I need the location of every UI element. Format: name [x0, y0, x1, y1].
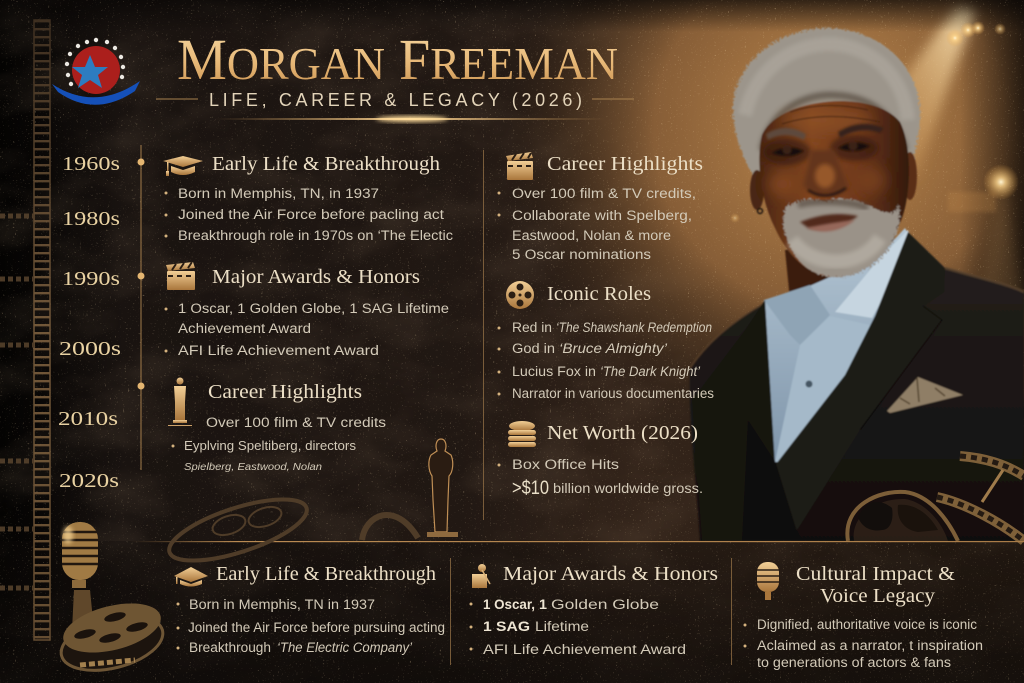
- oscar statue: [427, 439, 458, 537]
- timeline: [58, 145, 144, 492]
- heading: Iconic Roles: [547, 284, 651, 305]
- bullet list: Narrator in various documentaries: [512, 386, 714, 401]
- eye socket shading: [763, 139, 811, 165]
- bullet list: 1 Oscar,: [483, 597, 535, 612]
- decade 1990s: 1990s: [62, 268, 120, 290]
- bullet list: [744, 617, 983, 670]
- icon: award and clapper: [472, 564, 490, 588]
- heading: Voice Legacy: [820, 586, 935, 607]
- divider: center column: [483, 150, 484, 520]
- bullet list: 1 Oscar, 1 Golden Globe, 1 SAG Lifetime: [178, 301, 449, 316]
- panel: bottom early life: [174, 564, 445, 655]
- nose: [803, 150, 848, 195]
- heading: Cultural Impact &: [796, 564, 955, 585]
- hair: [733, 28, 920, 185]
- pocket square: [887, 377, 963, 413]
- mouth: [800, 214, 858, 230]
- decade 1980s: 1980s: [62, 208, 120, 230]
- heading: Career Highlights: [547, 154, 703, 175]
- text lines: >$10: [512, 478, 549, 499]
- bullet list: [470, 597, 686, 657]
- divider: bottom left: [450, 558, 451, 665]
- heading: Major Awards & Honors: [212, 267, 420, 288]
- panel: net worth: [498, 421, 703, 499]
- bullet list: Born in Memphis, TN, in 1937: [178, 186, 379, 201]
- ears: [750, 170, 764, 210]
- divider: bottom right: [731, 558, 732, 665]
- bullet list: [498, 186, 696, 262]
- subtitle: LIFE, CAREER & LEGACY (2026): [209, 90, 582, 110]
- panel: iconic roles: [498, 281, 714, 401]
- text lines: Box Office Hits: [512, 457, 619, 472]
- neck: [784, 236, 895, 292]
- bullet list: Dignified, authoritative voice is iconic: [757, 617, 977, 632]
- logo: [52, 38, 140, 105]
- portrait: [690, 28, 1024, 541]
- lapels: [776, 232, 945, 541]
- bullet list: Breakthrough: [189, 640, 271, 655]
- bullet list: ‘Bruce Almighty’: [559, 341, 668, 356]
- icon: film reel bottom left: [55, 595, 169, 680]
- text lines: [498, 457, 703, 499]
- ghost film reels: [163, 487, 418, 573]
- text lines: billion worldwide gross.: [553, 481, 703, 496]
- icon: clapperboard: [506, 152, 533, 180]
- bullet list: Achievement Award: [178, 321, 311, 336]
- bullet list: AFI Life Achievement Award: [483, 642, 686, 657]
- bullet list: Breakthrough role in 1970s on ‘The Electic: [178, 228, 453, 243]
- face: [759, 101, 909, 277]
- text lines: Over 100 film & TV credits: [206, 415, 386, 430]
- heading: Early Life & Breakthrough: [216, 564, 436, 585]
- jacket: [690, 250, 1024, 541]
- beard: [783, 199, 900, 277]
- panel: major awards: [164, 262, 449, 358]
- heading: Major Awards & Honors: [503, 564, 718, 585]
- icon: coin stack: [508, 421, 536, 447]
- bullet list: Joined the Air Force before pacling act: [178, 207, 444, 222]
- bullet list: Over 100 film & TV credits,: [512, 186, 696, 201]
- bullet list: Red in: [512, 320, 552, 335]
- panel: early life: [163, 154, 453, 243]
- icon: film reel: [506, 281, 534, 309]
- icon: microphone: [757, 562, 779, 600]
- bullet list: Joined the Air Force before pursuing acting: [188, 620, 445, 635]
- bullet list: ‘The Shawshank Redemption: [556, 320, 712, 335]
- forehead wrinkles: [782, 105, 880, 124]
- bullet list: Lifetime: [535, 619, 589, 634]
- bullet list: Born in Memphis, TN in 1937: [189, 597, 375, 612]
- heading: Early Life & Breakthrough: [212, 154, 440, 175]
- brows and eyes: [766, 124, 884, 156]
- film strip left: [0, 20, 50, 640]
- panel: cultural impact: [744, 562, 983, 670]
- bullet list: Lucius Fox in: [512, 364, 596, 379]
- panel: bottom awards: [470, 564, 718, 657]
- bullet list: ‘The Dark Knight’: [600, 364, 701, 379]
- bullet list: AFI Life Achievement Award: [178, 343, 379, 358]
- bullet list: Golden Globe: [551, 597, 659, 612]
- bullet list: 1: [539, 597, 548, 612]
- decade 2010s: 2010s: [58, 408, 118, 430]
- heading: Career Highlights: [208, 382, 362, 403]
- bullet list: [176, 597, 445, 655]
- bullet list: [164, 186, 453, 243]
- icon: vintage microphone: [62, 522, 98, 630]
- bullet list: ‘The Electric Company’: [277, 640, 413, 655]
- bullet list: Eastwood, Nolan & more: [512, 228, 671, 243]
- bullet list: [164, 301, 449, 358]
- bottom divider line: [130, 541, 1024, 542]
- bullet list: [498, 320, 714, 401]
- icon: clapperboard: [166, 262, 195, 290]
- heading: Net Worth (2026): [547, 423, 698, 444]
- bullet list: Collaborate with Spelberg,: [512, 208, 692, 223]
- decade 1960s: 1960s: [62, 153, 120, 175]
- text lines: Spielberg, Eastwood, Nolan: [184, 461, 322, 473]
- lights: [730, 21, 1019, 223]
- bullet list: God in: [512, 341, 555, 356]
- heading: [796, 564, 955, 607]
- icon: graduation cap: [174, 567, 208, 586]
- main title: MORGAN FREEMAN: [177, 27, 618, 92]
- film reel and strip right: [847, 456, 1024, 541]
- panel: career highlights right: [498, 152, 703, 262]
- panel: career highlights left: [168, 378, 386, 473]
- title: [156, 27, 634, 122]
- shirt: [752, 228, 912, 462]
- icon: award statue: [168, 378, 192, 426]
- bullet list: Aclaimed as a narrator, t inspiration: [757, 638, 983, 653]
- bullet list: to generations of actors & fans: [757, 655, 951, 670]
- text lines: Eyplving Speltiberg, directors: [184, 439, 356, 453]
- bullet list: 1 SAG: [483, 619, 530, 634]
- decade 2020s: 2020s: [59, 470, 119, 492]
- decade 2000s: 2000s: [59, 338, 121, 360]
- icon: graduation cap: [163, 156, 203, 176]
- bullet list: 5 Oscar nominations: [512, 247, 651, 262]
- text lines: [172, 415, 386, 473]
